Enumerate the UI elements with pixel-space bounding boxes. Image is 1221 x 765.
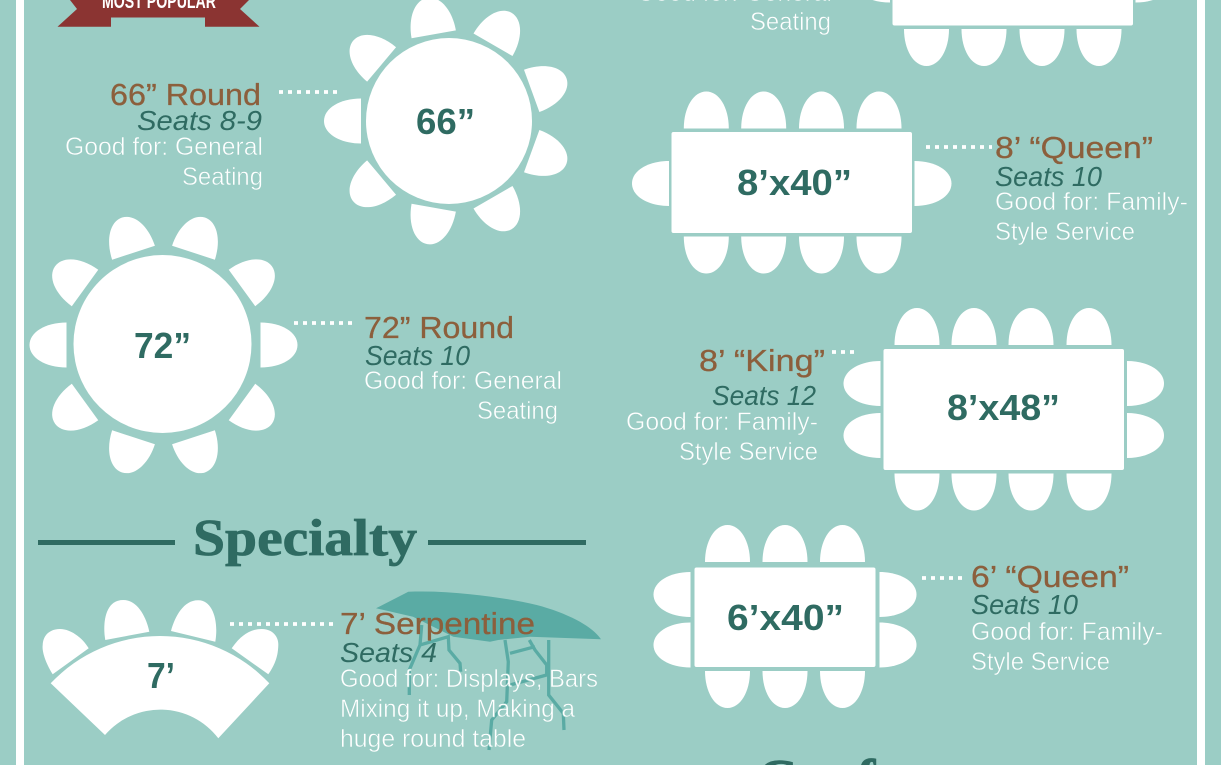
label: 72 inch round — [364, 310, 562, 425]
label: top table fragment: Seating — [750, 8, 831, 36]
label: 8 foot king: Seats 12 — [712, 380, 816, 411]
connector: 6 foot queen — [922, 576, 962, 580]
label: 7 foot serpentine: Mixing it up, Making a — [340, 695, 575, 723]
diagram: 66 inch round table — [324, 0, 574, 248]
label: 8 foot queen: 8’ “Queen” — [995, 130, 1153, 165]
label: 66 inch round: Seats 8-9 — [137, 105, 262, 136]
label: 72 inch round: Seats 10 — [365, 340, 470, 371]
label: 72 inch round: Seating — [477, 397, 558, 425]
label: 6 foot queen: 6’ “Queen” — [971, 559, 1129, 594]
label: 8 foot queen: Style Service — [995, 218, 1135, 246]
label: 6 foot queen: Seats 10 — [971, 589, 1078, 620]
label: 66 inch round: 66” Round — [110, 77, 261, 112]
label: 7 foot serpentine — [340, 606, 598, 753]
diagram: top rectangular table — [853, 0, 1172, 66]
label: 7 foot serpentine: Seats 4 — [340, 637, 437, 668]
ribbon: most popular — [58, 0, 260, 27]
label: 8 foot king — [626, 343, 825, 466]
diagram: 8 foot by 40 inch table — [632, 92, 952, 274]
label: 8 foot queen — [995, 130, 1188, 246]
diagram: 72 inch round table: 72” — [134, 325, 191, 366]
label: 66 inch round — [65, 77, 263, 191]
label: 66 inch round: Good for: General — [65, 133, 263, 161]
diagram: 8 foot by 48 inch table — [844, 308, 1164, 510]
label: 72 inch round: 72” Round — [364, 310, 514, 345]
illustration: serpentine table — [376, 591, 601, 750]
diagram: 72 inch round table — [30, 211, 298, 479]
label: 8 foot king: Good for: Family- — [626, 408, 818, 436]
frame: right border — [1197, 0, 1205, 765]
label: 7 foot serpentine: 7’ Serpentine — [340, 606, 535, 641]
label: 72 inch round: Good for: General — [364, 367, 562, 395]
label: 6 foot queen — [971, 559, 1163, 676]
label: 8 foot king: Style Service — [679, 438, 818, 466]
diagram: 7 foot serpentine table — [43, 600, 278, 738]
label: 7 foot serpentine: huge round table — [340, 725, 526, 753]
label: 6 foot queen: Style Service — [971, 648, 1110, 676]
label: 8 foot king: 8’ “King” — [699, 343, 825, 378]
connector: 72 inch — [294, 321, 354, 325]
diagram: 6 foot by 40 inch table — [654, 525, 916, 708]
label: 6 foot queen: Good for: Family- — [971, 618, 1163, 646]
connector: 8 foot king — [832, 350, 855, 354]
diagram: 66 inch round table: 66” — [416, 101, 475, 142]
label: 8 foot queen: Seats 10 — [995, 161, 1102, 192]
label: 8 foot queen: Good for: Family- — [995, 188, 1188, 216]
label: top table fragment — [636, 0, 832, 36]
connector: 66 inch — [279, 90, 338, 94]
diagram: 8 foot by 48 inch table: 8’x48” — [947, 387, 1060, 428]
connector: 8 foot queen — [926, 145, 992, 149]
diagram: 6 foot by 40 inch table: 6’x40” — [727, 597, 844, 638]
label: 66 inch round: Seating — [182, 163, 263, 191]
frame: left border — [16, 0, 24, 765]
heading: specialty: Specialty — [193, 510, 417, 567]
label: 7 foot serpentine: Good for: Displays, Bars — [340, 665, 598, 693]
heading: specialty — [38, 510, 586, 567]
diagram: 8 foot by 40 inch table: 8’x40” — [737, 162, 852, 203]
diagram: 7 foot serpentine table: 7’ — [147, 655, 175, 696]
connector: 7 foot — [230, 622, 333, 626]
